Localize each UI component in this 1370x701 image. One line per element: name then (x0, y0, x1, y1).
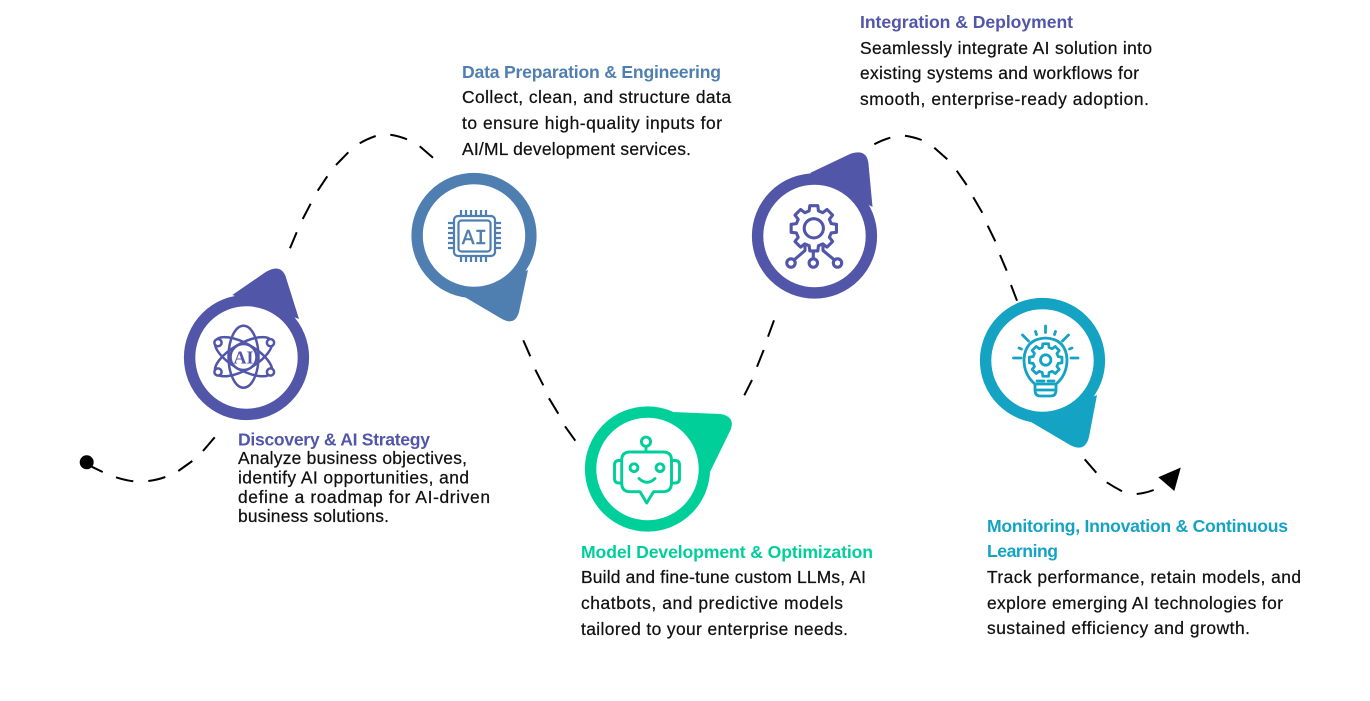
text: data preparation and engineering (462, 62, 731, 159)
text: model development and optimization: chatbots, and predictive models (581, 593, 843, 613)
text: model development and optimization (581, 542, 873, 639)
arrow head (1158, 468, 1181, 491)
icon: AI chip (448, 210, 501, 262)
text: integration and deployment: existing systems and workflows for (860, 63, 1139, 83)
text: discovery and AI strategy: identify AI opportunities, and (238, 468, 469, 488)
marker 4: integration (758, 152, 872, 293)
marker 3: model development (591, 412, 732, 526)
marker 5: monitoring (986, 304, 1099, 448)
icon: AI atom: AI (233, 348, 254, 368)
text: data preparation and engineering: AI/ML development services. (462, 139, 691, 159)
text: model development and optimization: Model Development & Optimization (581, 542, 873, 562)
text: discovery and AI strategy: define a roadmap for AI-driven (238, 487, 490, 507)
marker 1: discovery (190, 268, 303, 414)
icon: light bulb with gear (1014, 326, 1078, 396)
text: discovery and AI strategy: Analyze business objectives, (238, 448, 467, 468)
icon: robot (614, 437, 680, 503)
text: model development and optimization: Build and fine-tune custom LLMs, AI (581, 567, 866, 587)
text: integration and deployment: smooth, enterprise-ready adoption. (860, 89, 1149, 109)
text: model development and optimization: tailored to your enterprise needs. (581, 619, 848, 639)
icon: AI chip: AI (462, 228, 487, 251)
text: discovery and AI strategy: business solutions. (238, 506, 389, 526)
text: data preparation and engineering: Data Preparation & Engineering (462, 62, 721, 82)
dashed journey path (92, 135, 1154, 494)
text: integration and deployment (860, 12, 1152, 109)
text: monitoring, innovation and continuous learning: sustained efficiency and growth. (987, 618, 1250, 638)
text: discovery and AI strategy: Discovery & AI Strategy (238, 430, 430, 450)
marker 2: data preparation (417, 179, 531, 321)
text: monitoring, innovation and continuous learning: Learning (987, 541, 1058, 561)
text: data preparation and engineering: Collect, clean, and structure data (462, 87, 731, 107)
text: monitoring, innovation and continuous learning: explore emerging AI technologies for (987, 593, 1283, 613)
text: monitoring, innovation and continuous learning: Track performance, retain models, and (987, 567, 1301, 587)
icon: AI atom (209, 326, 278, 388)
start dot (80, 455, 94, 469)
text: integration and deployment: Seamlessly integrate AI solution into (860, 38, 1152, 58)
text: monitoring, innovation and continuous learning (987, 516, 1301, 638)
icon: gear circuit (787, 206, 842, 267)
text: data preparation and engineering: to ensure high-quality inputs for (462, 113, 722, 133)
text: discovery and AI strategy (238, 430, 490, 526)
text: integration and deployment: Integration & Deployment (860, 12, 1073, 32)
text: monitoring, innovation and continuous learning: Monitoring, Innovation & Continuous (987, 516, 1288, 536)
